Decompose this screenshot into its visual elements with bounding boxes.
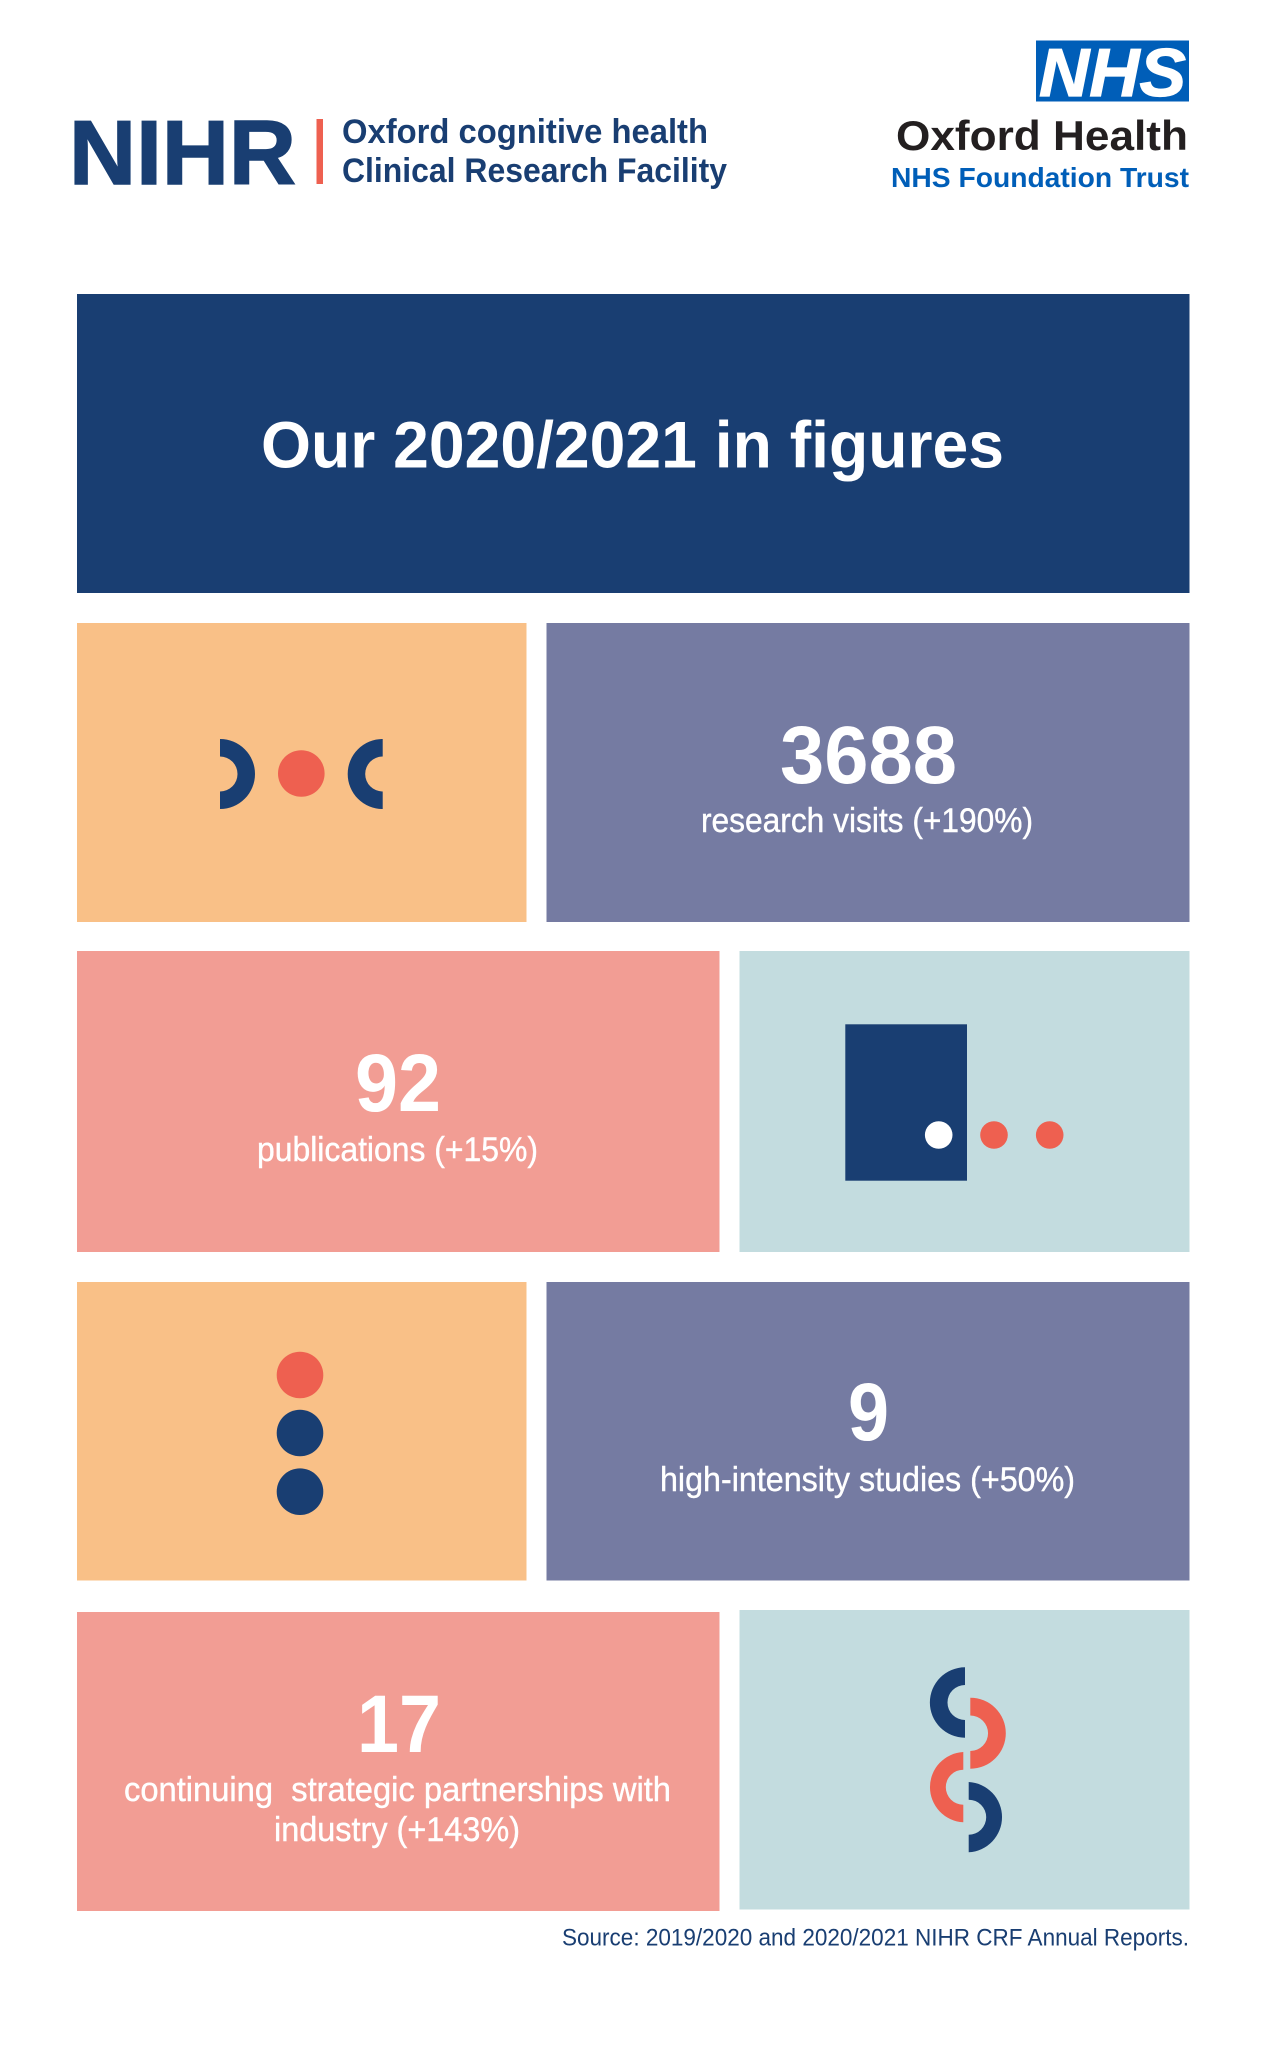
title banner — [77, 294, 1190, 593]
panel: publications — [77, 951, 720, 1252]
NIHR logo — [69, 103, 727, 204]
panel: high-intensity studies: 9 — [848, 1367, 889, 1458]
panel: publications: 92 — [355, 1038, 441, 1129]
panel: high-intensity studies: high-intensity studies (+50%) — [660, 1461, 1075, 1499]
title banner: Our 2020/2021 in figures — [261, 408, 1004, 482]
panel: research visits — [546, 623, 1190, 922]
panel: high-intensity studies — [546, 1282, 1190, 1580]
panel: interlocking arcs icon — [740, 1610, 1190, 1910]
panel: stacked dots icon — [77, 1282, 526, 1580]
panel: strategic partnerships: industry (+143%) — [274, 1811, 520, 1849]
panel: moon and dot icon — [77, 623, 526, 922]
source note: Source: 2019/2020 and 2020/2021 NIHR CRF Annual Reports. — [562, 1924, 1189, 1952]
NHS Oxford Health logo: NHS Foundation Trust — [891, 162, 1189, 193]
NHS Oxford Health logo — [891, 35, 1189, 193]
NIHR logo: Clinical Research Facility — [342, 152, 727, 190]
panel: strategic partnerships: continuing strategic partnerships with — [124, 1771, 671, 1809]
NIHR logo: NIHR — [69, 103, 296, 204]
panel: research visits: 3688 — [780, 710, 957, 801]
NHS Oxford Health logo: Oxford Health — [896, 112, 1188, 159]
panel: strategic partnerships — [77, 1612, 720, 1911]
NHS Oxford Health logo: NHS — [1039, 35, 1186, 111]
NIHR logo: Oxford cognitive health — [342, 113, 708, 151]
panel: publications: publications (+15%) — [257, 1131, 538, 1169]
panel: research visits: research visits (+190%) — [701, 802, 1033, 840]
panel: strategic partnerships: 17 — [357, 1679, 441, 1770]
panel: square and dots icon — [740, 951, 1190, 1252]
